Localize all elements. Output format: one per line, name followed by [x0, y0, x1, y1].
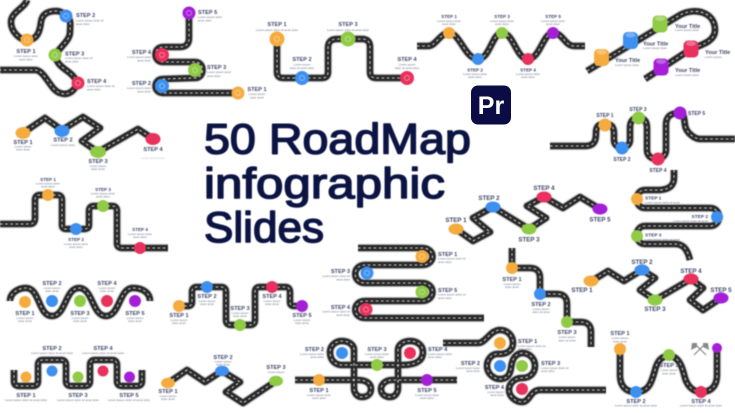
roadmap 20: U curves with flags	[610, 331, 722, 408]
step labels: STEP 3	[65, 52, 84, 58]
step labels: STEP 5	[119, 393, 139, 399]
step labels: STEP 2	[692, 214, 708, 220]
step labels: amet dolor	[466, 369, 480, 373]
step labels: Lorem ipsum	[294, 62, 311, 66]
step labels: Lorem ipsum dolor	[541, 19, 565, 23]
step labels: Lorem ipsum dolor sit	[518, 344, 546, 348]
step labels: amet dolor	[137, 58, 151, 62]
step labels: Lorem ipsum	[232, 311, 249, 315]
road	[14, 360, 142, 386]
step labels: dolor amet	[250, 96, 264, 100]
step labels: STEP 2	[76, 13, 95, 19]
road	[277, 39, 407, 78]
road	[550, 113, 735, 159]
step markers	[584, 265, 728, 305]
step labels: STEP 4	[397, 57, 417, 63]
step labels: dolor amet	[18, 319, 32, 323]
step labels: STEP 2	[53, 138, 73, 144]
step labels: Lorem ipsum	[17, 316, 34, 320]
step labels	[5, 346, 150, 402]
roadmap 1: winding top left	[0, 0, 115, 94]
step labels: Lorem ipsum dolor	[14, 54, 38, 58]
step labels: STEP 4	[428, 347, 448, 353]
title: 50 RoadMap	[204, 116, 471, 164]
step labels	[158, 355, 286, 401]
step markers	[494, 338, 528, 394]
step labels: STEP 2	[305, 347, 324, 353]
step labels: amet dolor	[65, 60, 79, 64]
icon: Premiere Pro badge: Pr	[478, 92, 504, 120]
step labels: STEP 3	[68, 393, 88, 399]
step labels: STEP 3	[338, 22, 358, 28]
step labels	[169, 294, 312, 325]
step labels: STEP 1	[309, 388, 329, 394]
step labels: Lorem ipsum dolor sit amet dolor	[327, 28, 369, 32]
step labels: amet dolor	[546, 22, 560, 26]
step labels: Lorem ipsum	[559, 335, 576, 339]
title labels: Lorem ipsum dolor	[675, 73, 699, 77]
step labels: dolor amet	[172, 321, 186, 325]
roadmap 5: cylinders diagonal	[587, 11, 730, 79]
roadmap 2: switchback	[127, 7, 267, 100]
step labels: Lorem ipsum	[90, 164, 107, 168]
step labels: STEP 2	[132, 81, 151, 87]
step labels: Lorem ipsum dolor sit amet dolor	[31, 351, 73, 355]
step labels: Lorem ipsum	[264, 299, 281, 303]
step labels: STEP 3	[494, 14, 510, 19]
step labels: Lorem ipsum dolor	[463, 72, 487, 76]
step labels: STEP 4	[520, 68, 536, 72]
step labels: Lorem ipsum	[612, 336, 629, 340]
step labels: STEP 3	[266, 365, 286, 371]
step labels: Lorem ipsum dolor	[64, 242, 88, 246]
roadmap 18: loops bottom center	[295, 341, 457, 400]
step markers	[449, 192, 607, 234]
step labels: amet dolor	[490, 393, 504, 397]
step labels: amet dolor	[207, 74, 221, 78]
step labels: amet dolor	[420, 396, 434, 400]
step labels: STEP 1	[441, 14, 457, 19]
step labels: amet dolor	[198, 18, 212, 22]
road	[168, 370, 276, 403]
step labels: amet dolor	[336, 313, 350, 317]
step labels: STEP 3	[518, 236, 540, 244]
step labels: dolor amet	[295, 321, 309, 325]
step labels: amet dolor	[438, 260, 452, 264]
step labels: Lorem ipsum dolor sit	[322, 274, 350, 278]
step labels: STEP 2	[42, 281, 62, 287]
step labels	[571, 259, 732, 313]
step labels	[502, 277, 577, 342]
step markers	[156, 7, 244, 99]
step labels: Lorem ipsum dolor	[127, 86, 151, 90]
step labels: Lorem ipsum dolor	[36, 182, 60, 186]
title	[204, 116, 471, 252]
road	[512, 248, 591, 347]
step labels: amet dolor	[370, 355, 384, 359]
road	[179, 287, 302, 325]
step labels	[13, 138, 165, 171]
step labels: STEP 2	[613, 157, 631, 163]
step labels: STEP 5	[292, 313, 312, 319]
step labels: STEP 4	[97, 281, 117, 287]
step labels: Lorem ipsum	[399, 62, 416, 66]
step labels: amet dolor	[133, 235, 147, 239]
step labels: Lorem ipsum dolor	[415, 393, 439, 397]
title labels: Your Title	[675, 24, 700, 30]
step markers	[360, 250, 428, 316]
step labels: Lorem ipsum dolor	[428, 352, 452, 356]
step labels: Lorem ipsum	[44, 286, 61, 290]
step labels: dolor amet	[91, 167, 105, 171]
step labels: Lorem ipsum dolor	[198, 15, 222, 19]
step labels: STEP 5	[688, 111, 705, 117]
step labels: STEP 1	[267, 22, 287, 28]
step labels: dolor amet	[128, 319, 142, 323]
road	[456, 197, 600, 241]
step labels: STEP 2	[631, 259, 653, 266]
road	[156, 13, 238, 93]
step labels: amet dolor	[19, 58, 33, 62]
step labels: Lorem ipsum dolor sit amet	[645, 200, 680, 204]
step labels: Lorem ipsum dolor sit	[65, 56, 93, 60]
step labels: Lorem ipsum	[661, 368, 678, 372]
step labels: amet dolor	[69, 245, 83, 249]
step labels: STEP 3	[645, 232, 662, 238]
step labels: Lorem ipsum	[160, 394, 177, 398]
step labels: amet dolor	[495, 22, 509, 26]
roadmap 9: tall arches right	[550, 107, 735, 174]
step labels: amet dolor	[96, 194, 110, 198]
step labels: Lorem ipsum dolor	[365, 352, 389, 356]
step labels: amet dolor	[541, 369, 555, 373]
step labels: STEP 3	[659, 363, 679, 369]
step labels: STEP 4	[485, 385, 505, 391]
step labels: dolor amet	[161, 397, 175, 401]
step labels: STEP 5	[710, 287, 732, 294]
step labels: STEP 2	[213, 355, 233, 361]
step labels: STEP 4	[691, 399, 711, 405]
step labels	[127, 10, 267, 100]
step labels: amet dolor	[310, 355, 324, 359]
step labels: Lorem ipsum dolor sit amet dolor	[57, 398, 99, 402]
step labels: Lorem ipsum	[127, 316, 144, 320]
step labels	[15, 281, 145, 323]
step labels: STEP 1	[158, 389, 178, 395]
step labels: STEP 3	[541, 361, 560, 367]
step labels	[437, 14, 565, 79]
title labels: Your Title	[615, 58, 640, 64]
step labels	[36, 177, 152, 249]
step markers	[270, 32, 414, 84]
title labels: Lorem ipsum dolor	[643, 46, 667, 50]
step labels: Lorem ipsum dolor sit amet	[645, 238, 680, 242]
step labels: STEP 1	[610, 331, 630, 337]
step labels: Lorem ipsum dolor	[456, 366, 480, 370]
step labels: amet dolor	[521, 75, 535, 79]
step markers	[20, 296, 140, 308]
road	[417, 33, 585, 59]
step labels: Lorem ipsum	[487, 390, 505, 394]
step labels: Lorem ipsum dolor sit	[87, 84, 115, 88]
step labels	[14, 13, 115, 92]
step labels: STEP 4	[132, 50, 152, 56]
step markers	[506, 262, 572, 328]
step labels: STEP 2	[478, 195, 500, 202]
roadmap 3: square bends	[256, 22, 419, 84]
roadmap 14: wave lower left	[10, 281, 150, 323]
step labels: STEP 3	[230, 306, 250, 312]
step labels	[645, 196, 708, 242]
roadmap 11: zig-zag center right	[445, 185, 611, 244]
step labels: dolor amet	[45, 289, 59, 293]
step markers	[314, 348, 432, 386]
title labels: Your Title	[675, 68, 700, 74]
step labels: STEP 5	[417, 388, 437, 394]
step labels: STEP 4	[262, 294, 282, 300]
step markers	[614, 344, 722, 398]
step labels: STEP 2	[42, 346, 62, 352]
step labels: STEP 3	[331, 269, 350, 275]
step markers	[16, 126, 160, 158]
step labels: dolor amet	[73, 319, 87, 323]
roadmap 10: serpentine right	[632, 170, 722, 260]
step markers	[632, 194, 722, 242]
cylinder markers	[594, 16, 698, 75]
step labels: STEP 4	[143, 147, 163, 153]
road	[587, 11, 715, 79]
title labels: Lorem ipsum dolor	[615, 63, 639, 67]
step labels: dolor sit amet	[558, 338, 576, 342]
step labels: amet dolor	[312, 396, 326, 400]
step labels: Lorem ipsum dolor	[207, 70, 231, 74]
step labels: STEP 5	[545, 14, 561, 19]
step labels: Lorem ipsum	[99, 286, 116, 290]
step labels: STEP 2	[461, 361, 480, 367]
step labels: STEP 1	[13, 140, 33, 146]
roadmap 17: zig-zag bottom	[158, 355, 286, 403]
roadmap 6: zig-zag left	[13, 117, 165, 171]
step labels: STEP 2	[467, 68, 483, 72]
step labels: STEP 1	[247, 87, 267, 93]
title labels	[615, 24, 730, 77]
step labels: Lorem ipsum	[249, 92, 266, 96]
step labels: Lorem ipsum dolor sit amet dolor	[82, 351, 124, 355]
roadmap 7: steps left middle	[0, 177, 168, 254]
step labels: dolor sit amet dolor	[395, 66, 419, 70]
step labels: Lorem ipsum dolor	[91, 192, 115, 196]
step labels: STEP 1	[40, 177, 56, 182]
icon: checkered flags	[691, 343, 709, 355]
step labels: amet dolor	[442, 22, 456, 26]
step labels: Lorem ipsum	[268, 370, 285, 374]
road	[295, 341, 457, 397]
step labels: STEP 4	[93, 346, 113, 352]
step labels: STEP 4	[680, 268, 702, 275]
roadmap 13: descending stairs	[502, 248, 591, 347]
step labels: Lorem ipsum dolor	[141, 156, 165, 160]
step labels: STEP 1	[502, 277, 522, 283]
step labels: STEP 2	[626, 399, 646, 405]
step labels: Lorem ipsum dolor	[490, 19, 514, 23]
step labels: Lorem ipsum dolor	[437, 19, 461, 23]
step labels: Lorem ipsum	[504, 282, 521, 286]
road	[0, 195, 168, 248]
roadmap 12: zig-zag lower right	[571, 259, 732, 313]
step labels: Lorem ipsum dolor	[307, 393, 331, 397]
step labels: Lorem ipsum	[72, 316, 89, 320]
title: Slides	[204, 204, 324, 252]
step labels: STEP 3	[70, 311, 90, 317]
step labels: Lorem ipsum	[171, 318, 188, 322]
road	[10, 288, 150, 316]
step labels: amet dolor	[438, 296, 452, 300]
road	[637, 170, 719, 260]
roadmap 8: serpentine center	[322, 248, 484, 318]
step labels: amet dolor	[428, 355, 442, 359]
step labels: STEP 1	[645, 196, 662, 202]
step labels: STEP 1	[16, 49, 36, 55]
step labels: Lorem ipsum dolor sit amet dolor	[108, 398, 150, 402]
step labels: dolor amet	[233, 314, 247, 318]
step markers	[162, 366, 282, 388]
icon: Premiere Pro badge	[471, 86, 511, 124]
step labels: Lorem ipsum	[199, 299, 216, 303]
step labels	[596, 107, 705, 174]
step labels: Lorem ipsum	[294, 318, 311, 322]
step labels: amet dolor	[336, 278, 350, 282]
step labels: STEP 3	[629, 107, 647, 113]
step labels: STEP 4	[649, 168, 667, 174]
step labels: STEP 1	[571, 287, 593, 294]
step labels: dolor amet	[613, 340, 627, 344]
step labels: Lorem ipsum	[15, 144, 32, 148]
step labels: STEP 5	[438, 288, 457, 294]
road	[620, 349, 717, 392]
step labels: STEP 3	[367, 347, 387, 353]
step labels: STEP 1	[169, 313, 189, 319]
step labels: dolor amet	[100, 289, 114, 293]
step labels: Lorem ipsum dolor sit amet dolor	[5, 398, 47, 402]
step labels: STEP 1	[15, 311, 35, 317]
step labels	[610, 331, 722, 408]
step labels: Lorem ipsum dolor	[516, 72, 540, 76]
step labels: Lorem ipsum dolor	[127, 55, 151, 59]
step labels: STEP 3	[207, 65, 226, 71]
step labels: STEP 3	[95, 187, 111, 192]
step labels: amet dolor	[76, 22, 90, 26]
title labels: Your Title	[705, 50, 730, 56]
step labels: STEP 2	[68, 237, 84, 242]
step labels: dolor amet	[16, 148, 30, 152]
step labels: amet dolor	[137, 90, 151, 94]
step labels: STEP 2	[197, 294, 217, 300]
road	[590, 270, 721, 310]
step markers	[21, 366, 134, 382]
step labels: dolor sit amet	[532, 310, 550, 314]
step markers	[21, 10, 84, 89]
step labels: STEP 3	[557, 330, 577, 336]
step labels: STEP 5	[589, 216, 611, 224]
step labels	[300, 347, 452, 400]
roadmap 4: wave top	[417, 14, 585, 79]
road	[355, 248, 484, 318]
step labels	[322, 252, 466, 317]
step markers	[42, 190, 146, 254]
step markers	[599, 107, 686, 165]
step labels: STEP 1	[438, 252, 457, 258]
step labels: STEP 2	[531, 302, 551, 308]
step labels	[256, 22, 419, 70]
step labels: Lorem ipsum dolor sit	[438, 292, 466, 296]
step labels: Lorem ipsum dolor sit amet	[673, 219, 708, 223]
step labels: Lorem ipsum dolor sit amet dolor	[256, 28, 298, 32]
title: infographic	[204, 160, 445, 208]
roadmap 15: square wave bottom left	[5, 346, 150, 402]
step labels: STEP 3	[88, 159, 108, 165]
step labels: amet dolor	[518, 347, 532, 351]
step labels: STEP 1	[596, 113, 614, 119]
step labels: STEP 5	[198, 10, 217, 16]
step labels: Lorem ipsum dolor	[51, 143, 75, 147]
step labels: STEP 4	[87, 79, 107, 85]
step labels: amet dolor	[41, 184, 55, 188]
step labels: Lorem ipsum dolor	[300, 352, 324, 356]
step labels: dolor amet	[505, 285, 519, 289]
step labels: Lorem ipsum dolor sit	[76, 18, 104, 22]
title labels: Lorem ipsum	[705, 55, 722, 59]
step labels: amet dolor	[468, 75, 482, 79]
step labels: STEP 4	[132, 227, 148, 232]
step labels: STEP 1	[16, 393, 36, 399]
step labels: Lorem ipsum dolor sit amet dolor	[680, 404, 722, 408]
step markers	[444, 28, 558, 64]
step labels: STEP 4	[533, 185, 555, 192]
title labels: Lorem ipsum dolor	[675, 28, 699, 32]
step labels: STEP 4	[331, 305, 351, 311]
title labels: Your Title	[643, 42, 668, 48]
step labels: dolor sit amet dolor	[290, 66, 314, 70]
step labels: STEP 1	[445, 217, 467, 224]
step labels: dolor amet	[662, 372, 676, 376]
step labels: dolor amet	[265, 302, 279, 306]
step labels: dolor amet	[200, 302, 214, 306]
step labels: dolor amet	[216, 362, 230, 366]
step labels: Lorem ipsum dolor sit	[541, 366, 569, 370]
road	[443, 330, 606, 402]
step labels	[456, 339, 569, 397]
step labels	[445, 185, 611, 244]
step labels: STEP 5	[125, 311, 145, 317]
roadmap 16: stepped bottom left-center	[169, 282, 312, 330]
roadmap 19: curled road	[443, 330, 606, 402]
road	[0, 0, 78, 94]
step labels: STEP 3	[644, 306, 666, 313]
step labels: Lorem ipsum dolor sit	[322, 310, 350, 314]
step labels: Lorem ipsum	[533, 307, 550, 311]
step labels: STEP 2	[292, 57, 312, 63]
step labels: amet dolor	[87, 88, 101, 92]
step labels: Lorem ipsum	[215, 360, 232, 364]
step labels: Lorem ipsum dolor sit	[438, 256, 466, 260]
road	[23, 117, 153, 152]
step labels: Lorem ipsum dolor	[128, 232, 152, 236]
step labels: STEP 1	[518, 339, 537, 345]
step labels: Lorem ipsum dolor sit amet dolor	[615, 404, 657, 408]
step markers	[174, 282, 308, 330]
